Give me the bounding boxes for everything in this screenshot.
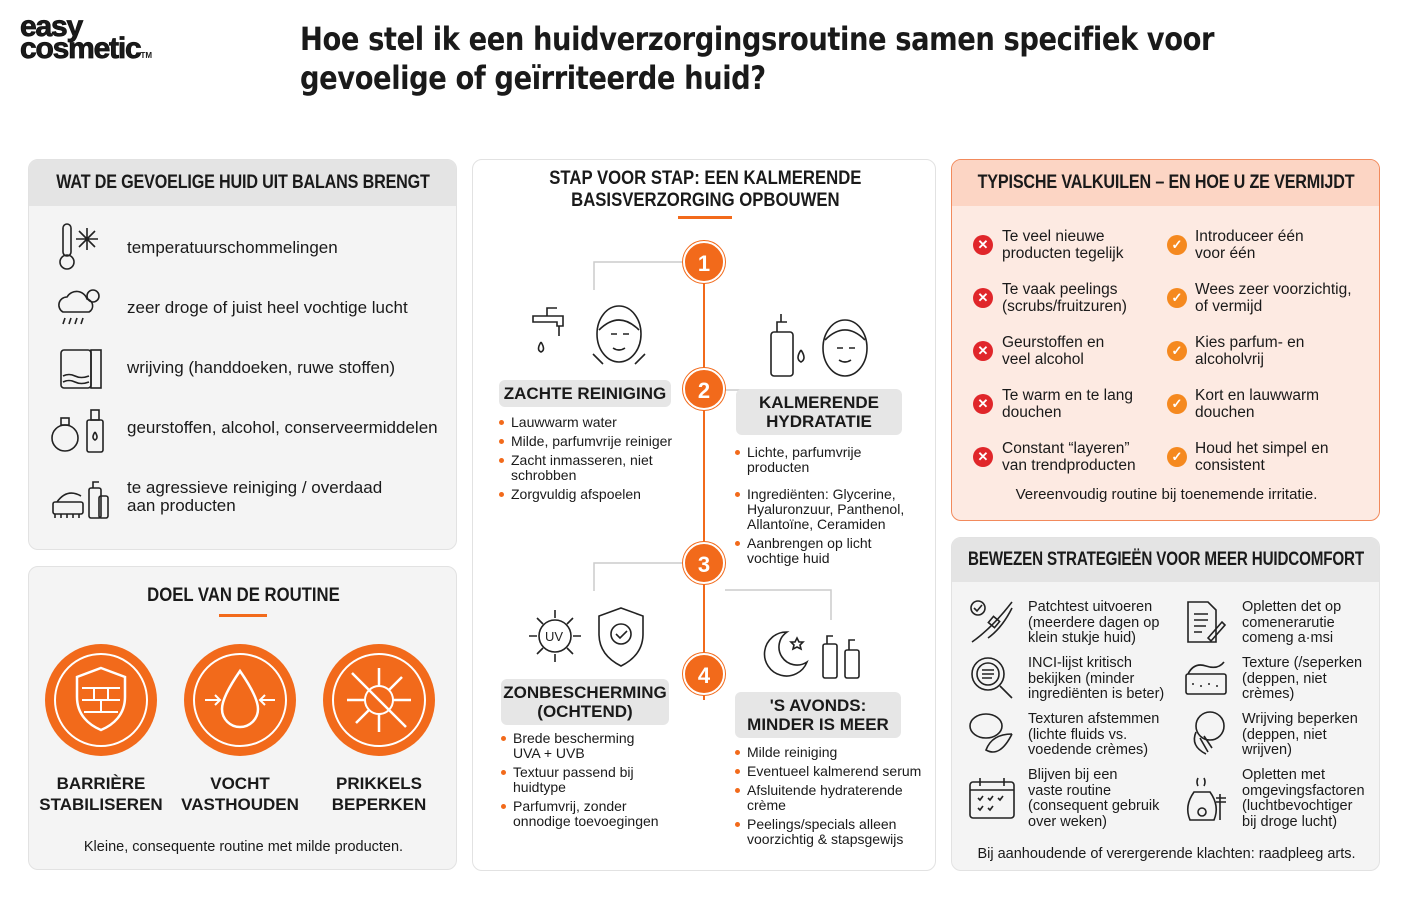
pitfall rows: [973, 228, 1352, 474]
step 4 number: [683, 653, 725, 695]
pitfall rows: Constant “layeren”: [1002, 440, 1130, 457]
text: Texturen afstemmen: [1028, 711, 1159, 727]
text: Texture (/seperken: [1242, 655, 1362, 671]
text: wrijven): [1242, 742, 1292, 758]
text: comeng a·msi: [1242, 630, 1333, 646]
step 4 list: Afsluitende hydraterende crème: [747, 782, 903, 813]
text: [1028, 711, 1159, 758]
icon: textures: [969, 713, 1013, 753]
step 2 label: KALMERENDE: [759, 393, 879, 412]
pitfall rows: ✕: [978, 237, 988, 252]
step 3 list: [501, 730, 659, 829]
step 1 list: Zorgvuldig afspoelen: [511, 486, 641, 502]
icon: patch: [970, 600, 1013, 643]
heading: pitfalls: TYPISCHE VALKUILEN – EN HOE U ZE VERMIJDT: [977, 172, 1354, 193]
title: Hoe stel ik een huidverzorgingsroutine samen specifiek voor: [300, 20, 1214, 58]
step 3 label: (OCHTEND): [537, 702, 633, 721]
text: omgevingsfactoren: [1242, 782, 1365, 798]
icon: perfume: [51, 409, 104, 453]
step 1 number: [683, 241, 725, 283]
step 1 label: [499, 380, 671, 407]
pitfall rows: ✓: [1172, 449, 1182, 464]
pitfall rows: Geurstoffen en: [1002, 334, 1104, 351]
text: (luchtbevochtiger: [1242, 798, 1352, 814]
text: Opletten met: [1242, 767, 1325, 783]
text: (lichte fluids vs.: [1028, 726, 1127, 742]
pitfall rows: Te vaak peelings: [1002, 281, 1117, 298]
pitfall rows: (scrubs/fruitzuren): [1002, 298, 1127, 315]
goal labels: VASTHOUDEN: [181, 795, 299, 814]
footnote: Bij aanhoudende of verergerende klachten: raadpleeg arts.: [977, 846, 1356, 862]
goal labels: STABILISEREN: [39, 795, 163, 814]
text: bekijken (minder: [1028, 670, 1134, 686]
step 2 number: [683, 368, 725, 410]
pitfall rows: douchen: [1002, 404, 1061, 421]
text: te agressieve reiniging / overdaad: [127, 478, 382, 497]
text: [1242, 655, 1362, 702]
goal labels: [39, 774, 426, 814]
step 4 list: Peelings/specials alleen voorzichtig & stapsgewijs: [747, 816, 903, 847]
text: ingrediënten is beter): [1028, 686, 1164, 702]
text: Blijven bij een: [1028, 767, 1117, 783]
panel: causes: [28, 159, 457, 550]
icon: cloud: [58, 289, 100, 324]
pitfall rows: Wees zeer voorzichtig,: [1195, 281, 1352, 298]
step 2 label: HYDRATATIE: [766, 412, 872, 431]
pitfall rows: Introduceer één: [1195, 228, 1304, 245]
pitfall rows: ✕: [978, 290, 988, 305]
text: [1242, 767, 1365, 830]
pitfall rows: ✓: [1172, 343, 1182, 358]
panel: strategies: [951, 537, 1380, 871]
icon: thermometer: [59, 223, 98, 270]
icon: calendar: [969, 778, 1015, 819]
step 4 list: Eventueel kalmerend serum: [747, 763, 921, 779]
pitfall rows: ✓: [1172, 237, 1182, 252]
goal labels: VOCHT: [210, 774, 270, 793]
icon: humidifier: [1186, 778, 1226, 821]
pitfall rows: Te veel nieuwe: [1002, 228, 1105, 245]
icon: sun uv and shield: [529, 607, 644, 667]
icon: irritation: [323, 644, 435, 756]
text: Wrijving beperken: [1242, 711, 1358, 727]
pitfall rows: producten tegelijk: [1002, 245, 1124, 262]
panel: steps: [472, 159, 936, 871]
text: aan producten: [127, 496, 236, 515]
heading: causes: WAT DE GEVOELIGE HUID UIT BALANS BRENGT: [56, 172, 429, 193]
icon: cream jar: [1185, 662, 1227, 695]
text: [1242, 599, 1341, 646]
goal labels: BARRIÈRE: [57, 774, 145, 793]
step 4 label: [735, 692, 901, 738]
step 3 list: Brede bescherming UVA + UVB: [513, 730, 634, 761]
heading: steps: BASISVERZORGING OPBOUWEN: [571, 190, 839, 211]
step 3 number: [683, 542, 725, 584]
text: vaste routine: [1028, 782, 1111, 798]
icon: scrub: [52, 481, 109, 519]
heading: strategies: BEWEZEN STRATEGIEËN VOOR MEER HUIDCOMFORT: [968, 549, 1363, 570]
pitfall rows: ✕: [978, 343, 988, 358]
text: (deppen, niet: [1242, 670, 1327, 686]
step 3 label: [501, 679, 669, 725]
text: voedende crèmes): [1028, 742, 1148, 758]
panel: pitfalls: [951, 159, 1380, 521]
step 4 list: [735, 744, 921, 847]
step 2 list: [735, 444, 904, 566]
heading: strategies: [952, 538, 1379, 582]
step 1 number: 1: [698, 251, 710, 276]
text: geurstoffen, alcohol, conserveermiddelen: [127, 418, 438, 437]
icon: towel: [60, 349, 102, 389]
text: comenerarutie: [1242, 614, 1335, 630]
pitfall rows: Te warm en te lang: [1002, 387, 1133, 404]
step 1 list: [499, 414, 672, 502]
text: Patchtest uitvoeren: [1028, 599, 1152, 615]
text: klein stukje huid): [1028, 630, 1136, 646]
step 2 label: [736, 389, 902, 435]
heading: steps: STAP VOOR STAP: EEN KALMERENDE: [549, 168, 861, 189]
text: [1028, 599, 1159, 646]
text: zeer droge of juist heel vochtige lucht: [127, 298, 408, 317]
pitfall rows: alcoholvrij: [1195, 351, 1264, 368]
pitfall rows: Houd het simpel en: [1195, 440, 1329, 457]
text: temperatuurschommelingen: [127, 238, 338, 257]
step 3 list: Textuur passend bij huidtype: [513, 764, 634, 795]
text: bij droge lucht): [1242, 814, 1337, 830]
footnote: Kleine, consequente routine met milde producten.: [84, 839, 403, 855]
step 4 list: Milde reiniging: [747, 744, 837, 760]
heading: steps: [549, 168, 861, 211]
text: [1028, 767, 1160, 830]
step 2 list: Aanbrengen op licht vochtige huid: [747, 535, 872, 566]
text: over weken): [1028, 814, 1107, 830]
title: gevoelige of geïrriteerde huid?: [300, 59, 766, 97]
heading: causes: [29, 160, 456, 206]
timeline: [703, 240, 705, 700]
heading: pitfalls: [952, 160, 1379, 206]
text: [127, 478, 382, 515]
icon: towel face: [1194, 711, 1225, 755]
pitfall rows: veel alcohol: [1002, 351, 1084, 368]
logo: [20, 10, 152, 65]
logo: cosmeticTM: [20, 32, 152, 65]
step 4 number: 4: [698, 663, 710, 688]
pitfall rows: douchen: [1195, 404, 1254, 421]
text: (meerdere dagen op: [1028, 614, 1159, 630]
pitfall rows: ✕: [978, 449, 988, 464]
pitfall rows: Kort en lauwwarm: [1195, 387, 1319, 404]
step 2 list: Lichte, parfumvrije producten: [747, 444, 861, 475]
heading: goal: DOEL VAN DE ROUTINE: [147, 585, 340, 606]
pitfall rows: ✓: [1172, 396, 1182, 411]
icon: magnifier: [971, 657, 1012, 699]
pitfall rows: consistent: [1195, 457, 1265, 474]
icon: moisture: [184, 644, 296, 756]
icon: barrier: [45, 644, 157, 756]
pitfall rows: van trendproducten: [1002, 457, 1136, 474]
icon: moon and bottles: [764, 631, 860, 679]
footnote: Vereenvoudig routine bij toenemende irritatie.: [1016, 486, 1317, 503]
text: crèmes): [1242, 686, 1294, 702]
icon: tap and face: [532, 305, 646, 365]
step 3 list: Parfumvrij, zonder onnodige toevoegingen: [513, 798, 659, 829]
text: [1028, 655, 1164, 702]
step 1 list: Zacht inmasseren, niet schrobben: [511, 452, 653, 483]
step 3 number: 3: [698, 552, 710, 577]
pitfall rows: Kies parfum- en: [1195, 334, 1304, 351]
icon: bottle and face: [770, 314, 868, 377]
panel: goal: [28, 566, 457, 870]
step 4 label: MINDER IS MEER: [747, 715, 889, 734]
step 2 number: 2: [698, 378, 710, 403]
goal labels: PRIKKELS: [336, 774, 422, 793]
goal labels: BEPERKEN: [332, 795, 426, 814]
pitfall rows: of vermijd: [1195, 298, 1262, 315]
title: [300, 20, 1214, 97]
step 2 list: Ingrediënten: Glycerine, Hyaluronzuur, Panthenol, Allantoïne, Ceramiden: [747, 486, 904, 532]
text: [1242, 711, 1358, 758]
icon: sun uv and shield: UV: [545, 629, 563, 644]
step 3 label: ZONBESCHERMING: [503, 683, 667, 702]
text: (deppen, niet: [1242, 726, 1327, 742]
step 4 label: 'S AVONDS:: [770, 696, 866, 715]
text: wrijving (handdoeken, ruwe stoffen): [127, 358, 395, 377]
icon: document: [1187, 601, 1226, 643]
text: (consequent gebruik: [1028, 798, 1159, 814]
step 1 list: Milde, parfumvrije reiniger: [511, 433, 672, 449]
pitfall rows: voor één: [1195, 245, 1255, 262]
logo: easy: [20, 10, 82, 43]
step 1 label: ZACHTE REINIGING: [504, 384, 666, 403]
pitfall rows: ✓: [1172, 290, 1182, 305]
step 1 list: Lauwwarm water: [511, 414, 617, 430]
text: Opletten det op: [1242, 599, 1341, 615]
text: INCI-lijst kritisch: [1028, 655, 1132, 671]
pitfall rows: ✕: [978, 396, 988, 411]
